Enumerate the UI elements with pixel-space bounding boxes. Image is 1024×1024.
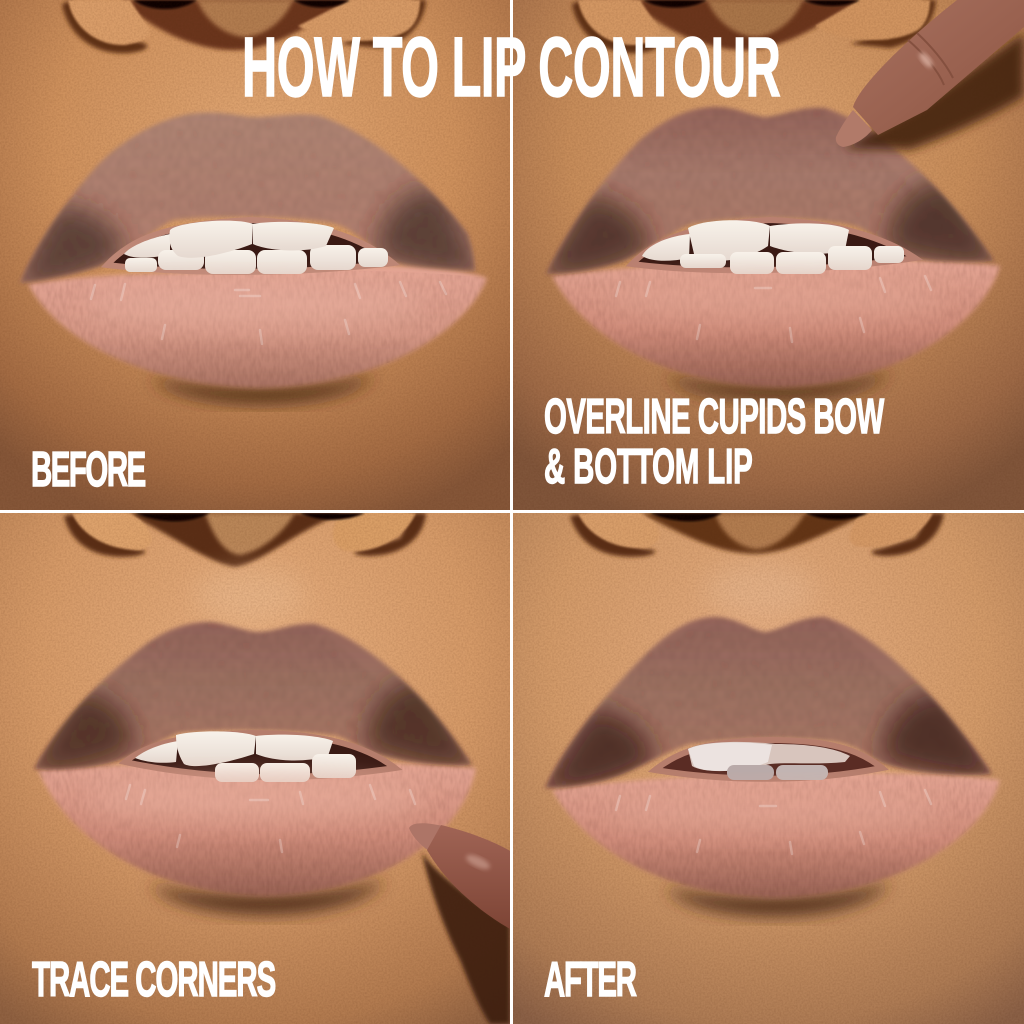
upper lip corner shading — [24, 622, 482, 775]
skin texture — [0, 513, 510, 1024]
skin background — [513, 0, 1024, 510]
title: HOW TO LIP CONTOUR — [242, 20, 781, 114]
shadow beneath lower lip — [150, 375, 375, 403]
lower lip gloss — [616, 790, 931, 854]
upper lip — [546, 107, 994, 274]
skin background — [0, 513, 510, 1024]
label: overline cupids bow and bottom lip — [544, 398, 885, 484]
label: before: BEFORE — [31, 441, 146, 497]
mouth interior — [655, 740, 882, 779]
lower lip texture — [28, 270, 487, 388]
upper lip — [34, 622, 472, 769]
skin texture — [513, 513, 1024, 1024]
lower lip texture — [552, 259, 1000, 387]
lips — [536, 107, 1004, 387]
skin background — [0, 0, 510, 510]
icon: lip pencil — [836, 0, 1024, 147]
mouth interior — [632, 220, 915, 270]
lower lip gloss — [616, 276, 931, 342]
pencil ring — [917, 33, 953, 78]
skin background — [513, 513, 1024, 1024]
lower lip — [28, 266, 487, 388]
lower lip highlight — [85, 281, 425, 329]
mouth interior — [107, 220, 393, 272]
pencil shadow — [843, 33, 1024, 150]
pencil tip — [836, 110, 872, 147]
lower lip gloss — [126, 785, 415, 852]
pencil highlight — [464, 852, 492, 872]
label: overline cupids bow and bottom lip: OVERLINE CUPIDS BOW — [544, 388, 885, 444]
lower lip highlight — [85, 776, 425, 824]
teeth — [688, 742, 850, 780]
teeth — [124, 221, 388, 274]
nose and nostrils — [572, 0, 936, 53]
nose and nostrils — [62, 0, 426, 53]
lower lip — [552, 773, 1000, 898]
skin texture — [0, 0, 510, 510]
upper lip — [20, 113, 475, 283]
philtrum highlight — [206, 556, 294, 615]
upper lip corner shading — [536, 107, 1004, 280]
label: trace corners: TRACE CORNERS — [32, 951, 276, 1007]
label: after: AFTER — [544, 951, 637, 1007]
lower lip highlight — [605, 278, 945, 322]
lips — [24, 622, 482, 896]
nose and nostrils — [570, 513, 944, 557]
lower lip texture — [38, 762, 476, 896]
lower lip highlight — [605, 790, 945, 834]
lips — [535, 617, 1002, 898]
nose and nostrils — [64, 513, 426, 567]
mouth interior — [125, 733, 395, 777]
icon: lip pencil — [409, 823, 512, 930]
pencil body — [853, 0, 1024, 135]
pencil tip — [409, 823, 443, 850]
lower lip gloss — [91, 282, 446, 344]
lower lip — [552, 259, 1000, 387]
panel: after — [513, 513, 1024, 1024]
shadow beneath lower lip — [665, 372, 890, 400]
upper lip — [545, 617, 992, 788]
lower lip texture — [552, 773, 1000, 898]
skin texture — [513, 0, 1024, 510]
lower lip — [38, 762, 476, 896]
shadow beneath lower lip — [665, 882, 890, 916]
lips — [10, 113, 487, 388]
panel: overline cupids bow and bottom lip — [513, 0, 1024, 510]
panel: before — [0, 0, 510, 510]
teeth — [642, 220, 904, 274]
upper lip corner shading — [10, 113, 485, 290]
label: overline cupids bow and bottom lip: & BOTTOM LIP — [544, 438, 753, 494]
upper lip corner shading — [535, 617, 1002, 795]
philtrum highlight — [705, 562, 815, 618]
shadow beneath lower lip — [150, 880, 385, 914]
teeth — [135, 731, 356, 782]
pencil shadow — [422, 853, 510, 1024]
pencil body — [427, 825, 512, 930]
panel: trace corners — [0, 513, 512, 1024]
